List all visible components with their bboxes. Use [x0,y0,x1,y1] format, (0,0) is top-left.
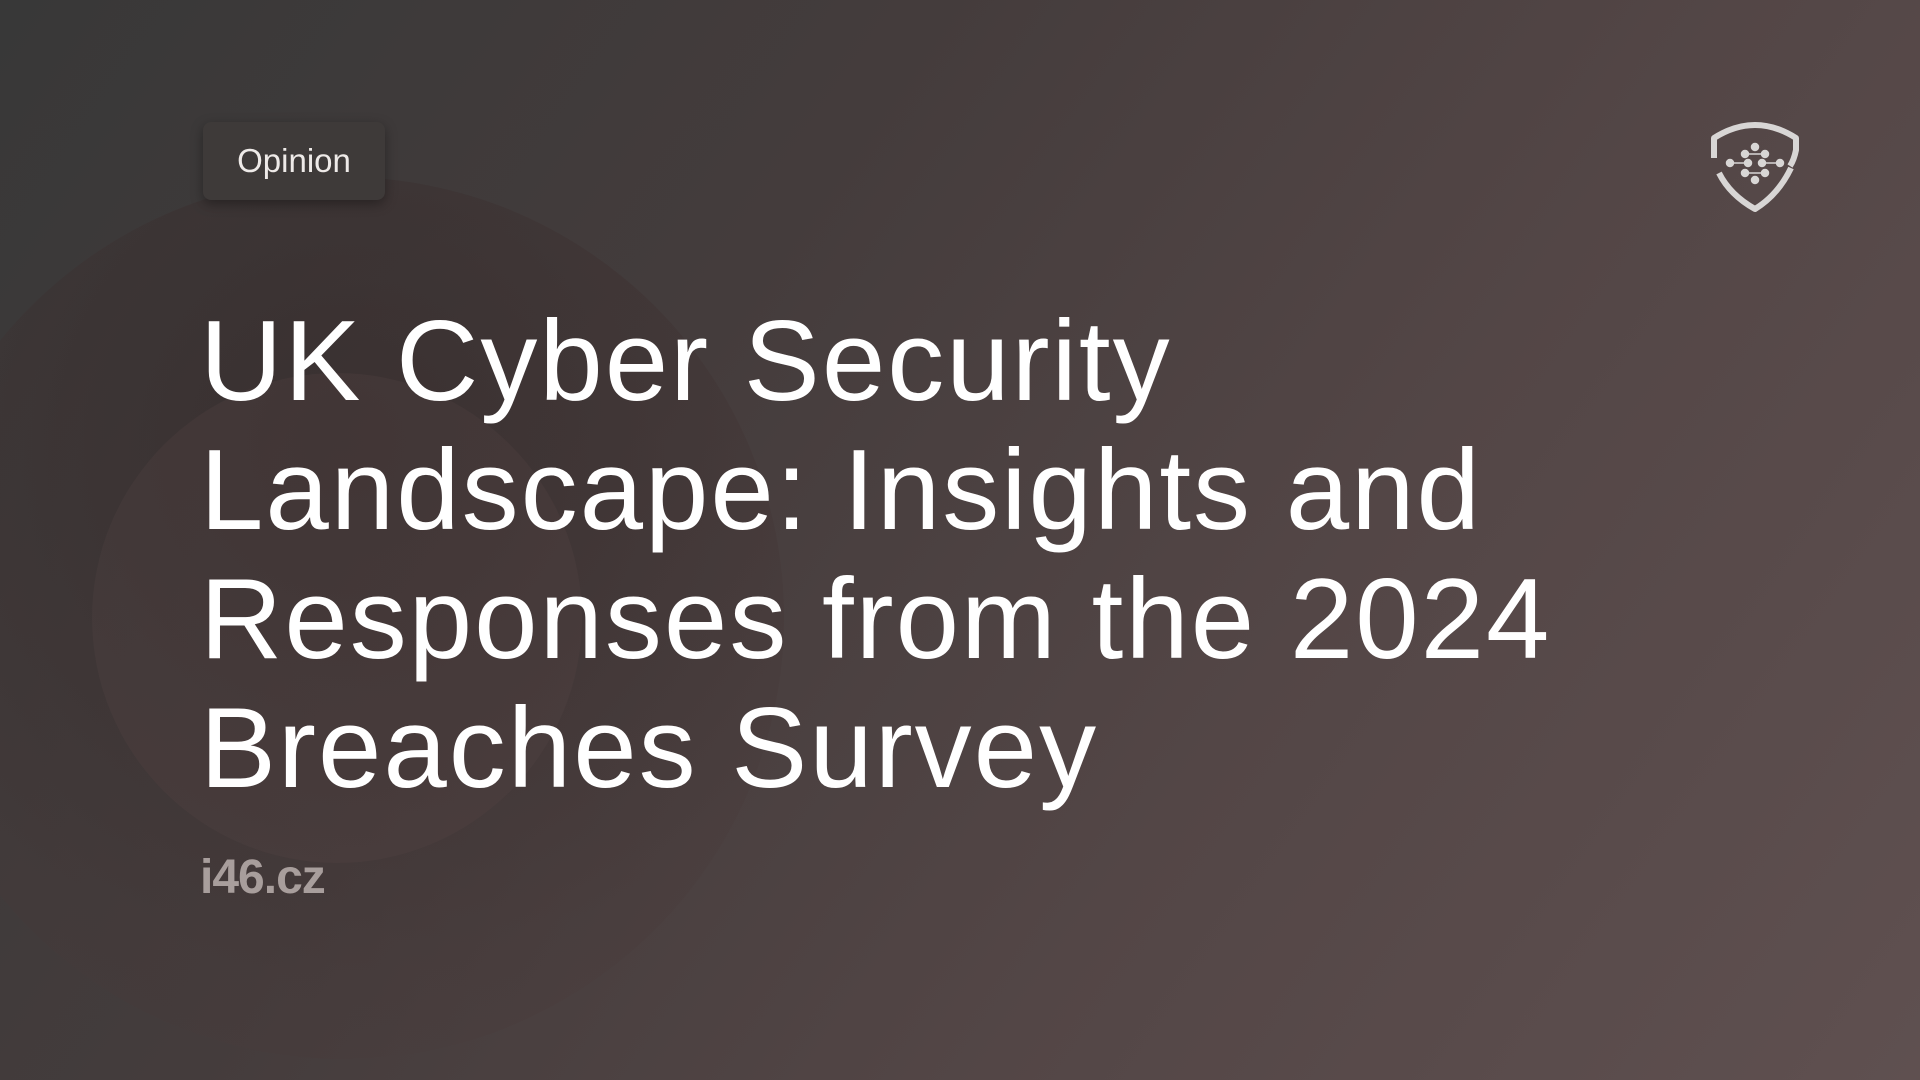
title: Breaches Survey [200,685,1098,812]
title: Landscape: Insights and [200,427,1482,554]
badge: Opinion: Opinion [237,142,351,179]
logo: shield [1711,122,1799,212]
source: i46.cz: i46.cz [200,851,325,904]
decorative circles [0,177,784,1059]
title: Responses from the 2024 [200,556,1551,683]
title: UK Cyber Security [200,298,1172,425]
badge: Opinion [203,122,385,200]
title [200,298,1551,812]
